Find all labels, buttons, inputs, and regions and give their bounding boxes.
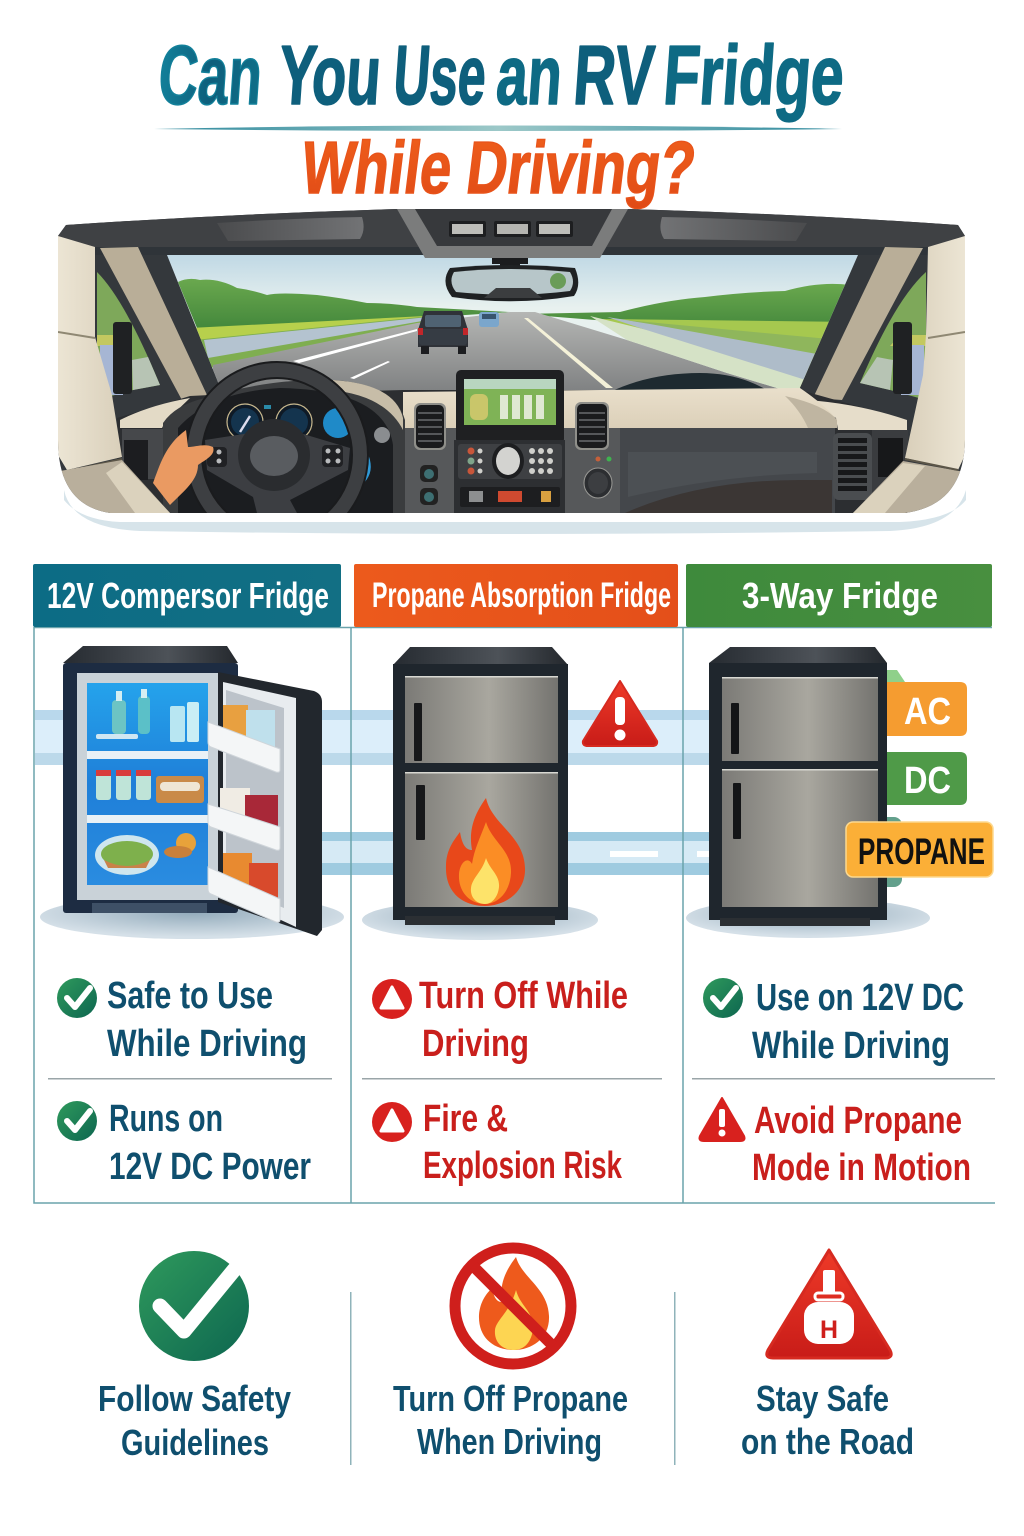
status: use on 12V: [703, 977, 964, 1067]
tip: follow safety guidelines: Guidelines: [121, 1422, 269, 1463]
left shelf: [120, 398, 190, 428]
road markings: [293, 329, 417, 363]
icon: big check: [139, 1251, 249, 1361]
right shelf: [817, 400, 907, 430]
badge: propane: [846, 822, 993, 877]
status: 12V: 12V DC Power: [109, 1146, 311, 1188]
tip: turn off propane: [393, 1248, 628, 1462]
dashboard: [117, 390, 907, 513]
right lower dash panel: [620, 428, 835, 513]
header: propane: [354, 564, 678, 627]
control stack: [454, 440, 565, 513]
air vents: [414, 402, 609, 450]
title: an: [494, 28, 565, 122]
status: safe: While Driving: [107, 1023, 307, 1065]
title: Fridge: [661, 28, 847, 122]
header: 3-way: 3-Way Fridge: [742, 575, 938, 616]
icon: propane tank warning: [767, 1250, 891, 1358]
badge: AC: [887, 682, 967, 736]
title: RV: [571, 28, 657, 122]
header: propane: Propane Absorption Fridge: [372, 576, 671, 615]
panel: 12V compressor fridge: [33, 564, 344, 1188]
infotainment screen: [456, 370, 564, 444]
cab shadow: [64, 490, 966, 534]
header band: [58, 205, 968, 247]
tip: turn off propane: When Driving: [417, 1421, 602, 1462]
status: safe: Safe to Use: [107, 975, 273, 1017]
status: fire risk: [372, 1098, 623, 1187]
tip: follow safety guidelines: Follow Safety: [98, 1378, 291, 1419]
icon: propane tank warning: H: [820, 1316, 838, 1344]
tip: stay safe on the road: on the Road: [741, 1421, 914, 1462]
driver hand: [153, 430, 214, 505]
header: 3-way: [686, 564, 992, 627]
badge: AC: AC: [904, 691, 951, 733]
icon: steel fridge with flame: [362, 647, 598, 940]
road band decoration: [35, 710, 715, 875]
guard rails right: [590, 316, 808, 388]
status: avoid propane: Mode in Motion: [752, 1147, 971, 1189]
status: 12V: Runs on: [109, 1098, 223, 1140]
side knobs: [420, 456, 612, 505]
title: Can: [156, 28, 265, 122]
open door: [218, 672, 322, 936]
status: use on 12V: While Driving: [752, 1025, 950, 1067]
status: use on 12V: Use on 12V DC: [756, 977, 964, 1019]
status: fire risk: Fire &: [423, 1098, 508, 1140]
sun visors: [217, 217, 364, 241]
lead car: [418, 311, 468, 354]
title: Use: [391, 28, 489, 122]
icon: 3-way fridge with power badges: [686, 647, 993, 938]
panel: propane absorption fridge: [354, 564, 678, 1187]
status: avoid propane: [700, 1098, 971, 1189]
instrument gauges: [226, 403, 390, 482]
left side window: [97, 272, 160, 400]
side trim left: [58, 236, 170, 513]
subtitle: While Driving?: [297, 126, 700, 209]
centre column: [403, 428, 620, 513]
header: 12V: 12V Compersor Fridge: [47, 575, 329, 616]
badge: DC: DC: [904, 760, 951, 802]
right vent: [833, 430, 908, 513]
right side window: [860, 272, 926, 400]
status: fire risk: Explosion Risk: [423, 1145, 623, 1187]
icon: open mini fridge: [40, 646, 344, 939]
windshield view: [160, 250, 860, 395]
status: turn off: [372, 975, 628, 1065]
fridge contents: [95, 689, 204, 875]
A-pillars: [100, 247, 207, 402]
steering wheel: [194, 370, 360, 540]
icon: no flame: [455, 1248, 571, 1364]
far car: [479, 312, 499, 327]
tip: turn off propane: Turn Off Propane: [393, 1378, 628, 1419]
status: safe: [57, 975, 307, 1065]
status: avoid propane: Avoid Propane: [754, 1100, 962, 1142]
rear view mirror: [445, 258, 578, 301]
binnacle: [163, 380, 405, 513]
tip: stay safe on the road: [741, 1250, 914, 1462]
tip: stay safe on the road: Stay Safe: [756, 1378, 889, 1419]
comparison table frame: [34, 627, 995, 1203]
side trim right: [853, 236, 965, 513]
badge: DC: [887, 752, 967, 805]
status: 12V: [57, 1098, 311, 1188]
status: turn off: Turn Off While: [419, 975, 628, 1017]
status: turn off: Driving: [422, 1023, 529, 1065]
panel: 3-way fridge: [686, 564, 995, 1189]
overhead console: [397, 209, 628, 258]
title: You: [276, 28, 384, 122]
title: [156, 28, 847, 122]
header: 12V: [33, 564, 341, 627]
tip: follow safety guidelines: [98, 1251, 291, 1463]
wiper: [614, 373, 764, 390]
icon: warning triangle: [583, 681, 657, 746]
illustration: RV cab view: [58, 205, 968, 540]
